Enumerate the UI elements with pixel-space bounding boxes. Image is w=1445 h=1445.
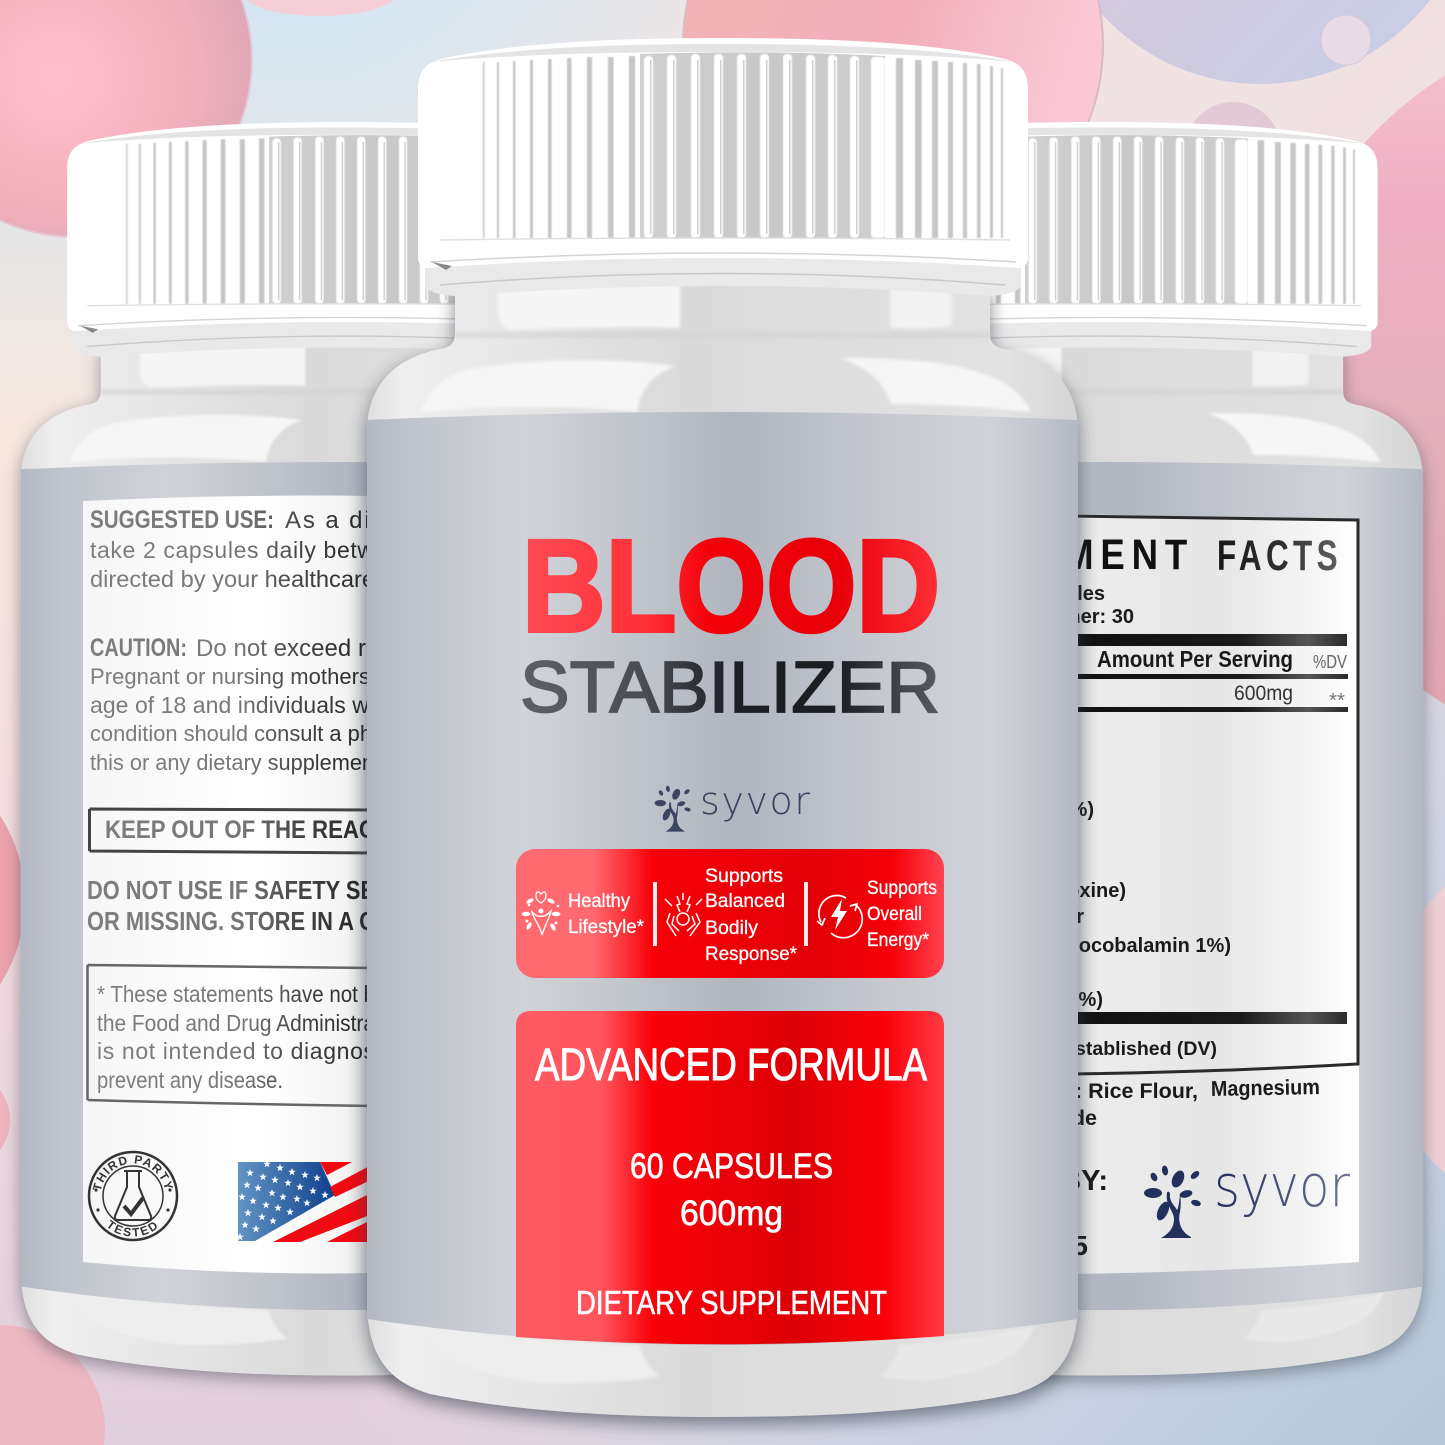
FDA disclaimer box: is not intended to diagnos — [97, 1038, 375, 1064]
supplement facts heading: FACTS — [1217, 532, 1342, 580]
safety seal warning: DO NOT USE IF SAFETY SE — [87, 875, 375, 905]
benefit: healthy lifestyle: Lifestyle* — [568, 916, 644, 938]
supplement facts heading: SUPPLEMENT — [876, 531, 1194, 579]
panel: benefits strip — [516, 849, 944, 978]
divider — [653, 882, 657, 946]
benefit: balanced bodily response: Supports — [705, 865, 783, 887]
dosage: 600mg — [680, 1194, 783, 1233]
panel: advanced formula — [516, 1011, 944, 1344]
panel: directions label — [83, 496, 375, 1274]
title: blood: BLOOD — [522, 512, 940, 659]
suggested use text — [90, 506, 385, 592]
icon: third party tested seal: THIRD PARTY — [92, 1155, 173, 1190]
caution text: Do not exceed r — [196, 635, 366, 662]
icon: third party tested seal — [88, 1150, 178, 1242]
FDA disclaimer box — [88, 965, 375, 1106]
front center bottle — [367, 38, 1078, 1417]
caution text — [90, 634, 374, 775]
benefit: overall energy — [867, 877, 937, 951]
distributed by: 5 — [1072, 1230, 1088, 1261]
distributed by: BY: — [1060, 1165, 1108, 1197]
FDA disclaimer box: * These statements have not b — [97, 981, 375, 1007]
ingredient fragments: Cyanocobalamin 1%) — [1030, 935, 1231, 957]
serving info: 60 Capsules — [988, 583, 1105, 605]
ingredient fragments: Established (DV) — [1062, 1038, 1217, 1060]
caution text: this or any dietary supplemen — [90, 750, 374, 775]
divider — [804, 882, 808, 946]
icon: american flag — [236, 1160, 375, 1242]
icon: healthy lifestyle — [522, 892, 560, 935]
ingredient fragments: r — [1076, 906, 1084, 928]
dietary supplement: DIETARY SUPPLEMENT — [576, 1284, 887, 1321]
safety seal warning — [87, 875, 375, 936]
FDA disclaimer box: the Food and Drug Administra — [97, 1010, 375, 1036]
caution text: condition should consult a ph — [90, 721, 372, 746]
benefit: healthy lifestyle: Healthy — [568, 890, 630, 912]
suggested use text: As a die — [285, 507, 385, 534]
serving info: Per Container: 30 — [968, 606, 1134, 628]
suggested use text: SUGGESTED USE: — [90, 506, 274, 534]
logo: syvor on facts label — [1144, 1152, 1350, 1238]
table rules — [1070, 634, 1348, 1024]
benefit: balanced bodily response: Response* — [705, 943, 797, 965]
benefit: balanced bodily response: Bodily — [705, 917, 758, 939]
suggested use text: take 2 capsules daily betw — [90, 537, 374, 563]
background left wash — [0, 0, 552, 1445]
caution text: age of 18 and individuals wi — [90, 692, 374, 718]
ingredient fragments — [1017, 799, 1231, 1060]
icon: bodily response — [665, 893, 702, 936]
benefit: balanced bodily response — [705, 865, 797, 965]
table amount row: 600mg — [1234, 682, 1293, 705]
icon: third party tested seal: TESTED — [108, 1220, 157, 1236]
benefit: healthy lifestyle — [568, 890, 644, 938]
logo: syvor on facts label: syvor — [1214, 1152, 1350, 1220]
other ingredients: Stearate, Gelatin Oxide — [862, 1106, 1097, 1130]
FDA disclaimer box: prevent any disease. — [97, 1067, 283, 1093]
icon: energy — [817, 896, 862, 938]
keep out of reach box: KEEP OUT OF THE REAC — [105, 816, 375, 844]
logo: syvor: syvor — [700, 779, 810, 823]
shadow: center bottle — [367, 292, 1078, 1424]
table amount row — [1234, 682, 1345, 712]
ingredient fragments: %) — [1079, 989, 1103, 1011]
distributed by — [1060, 1165, 1108, 1261]
advanced formula heading: ADVANCED FORMULA — [535, 1039, 927, 1090]
panel: supplement facts label — [1070, 514, 1359, 1274]
caution text: CAUTION: — [90, 634, 187, 662]
back-left bottle — [20, 122, 455, 1376]
other ingredients — [862, 1075, 1320, 1130]
table header: %DV — [1313, 652, 1347, 672]
benefit: overall energy: Overall — [867, 903, 922, 925]
benefit: balanced bodily response: Balanced — [705, 890, 785, 912]
ingredient fragments: Pyridoxine) — [1017, 880, 1126, 902]
other ingredients: Magnesium — [1211, 1075, 1320, 1101]
title: stabilizer: STABILIZER — [520, 648, 940, 728]
benefit: overall energy: Supports — [867, 877, 937, 899]
ingredient fragments: %) — [1070, 799, 1094, 821]
shadow: back-left bottle — [21, 352, 667, 1381]
serving info — [968, 583, 1134, 628]
suggested use text: directed by your healthcare — [90, 566, 375, 592]
shadow: back-right bottle — [777, 352, 1423, 1381]
keep out of reach box — [90, 809, 375, 853]
logo: syvor — [655, 779, 810, 832]
supplement facts box — [1070, 516, 1358, 1074]
table amount row: ** — [1329, 690, 1345, 712]
caution text: Pregnant or nursing mothers — [90, 664, 370, 689]
benefit: overall energy: Energy* — [867, 929, 929, 951]
other ingredients: Ingredients: Rice Flour, — [959, 1079, 1198, 1103]
capsule count: 60 CAPSULES — [630, 1147, 833, 1186]
table header: Amount Per Serving — [1097, 646, 1293, 672]
safety seal warning: OR MISSING. STORE IN A C — [87, 906, 375, 936]
back-right bottle — [777, 122, 1423, 1376]
